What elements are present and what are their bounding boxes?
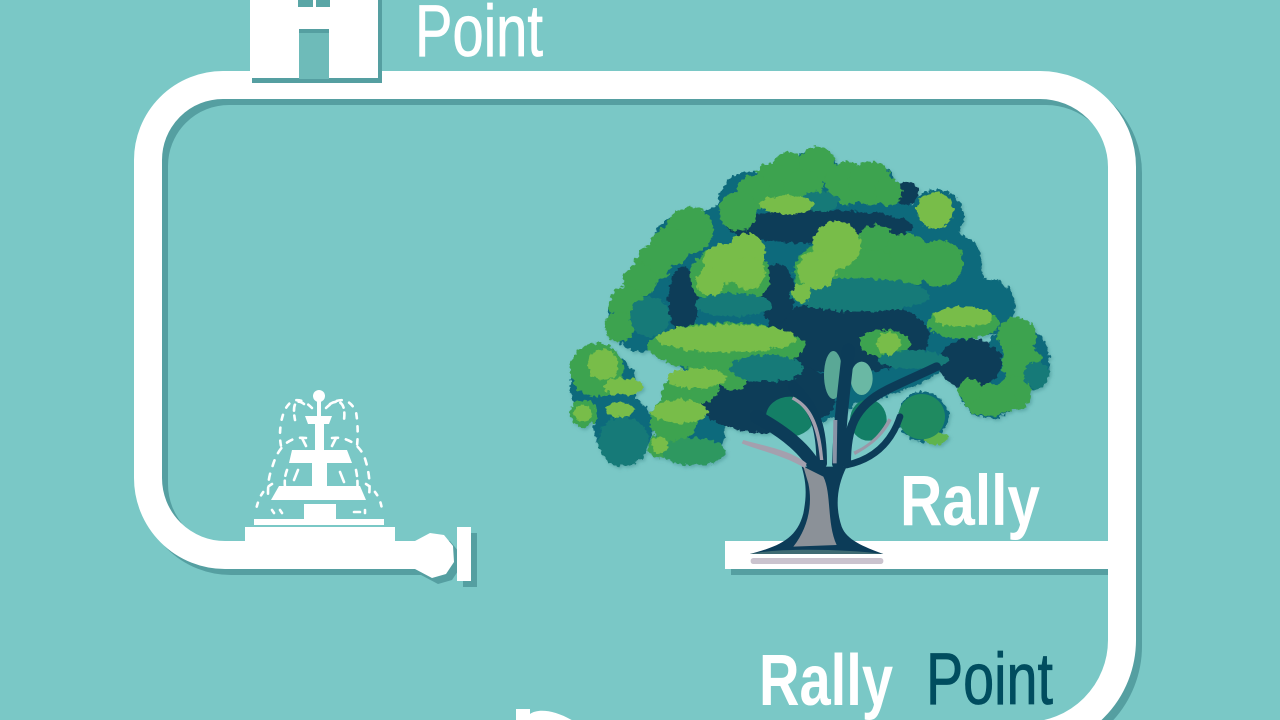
icon: building <box>250 0 382 83</box>
canopy light highlights <box>574 192 993 453</box>
canopy greens <box>570 147 1042 466</box>
canopy outer edge <box>570 150 1050 465</box>
pipe body <box>148 85 1122 720</box>
tree platform branch <box>725 541 1115 569</box>
pipe end cap <box>415 527 477 587</box>
label: Point bottom: Point <box>926 639 1053 720</box>
label: Rally on branch: Rally <box>900 462 1040 541</box>
pipe shadow <box>154 91 1128 720</box>
tree <box>570 147 1050 564</box>
tree trunk and branches <box>742 350 937 554</box>
tree gaps and inner leaves <box>766 351 945 441</box>
branch shadow <box>731 547 1115 575</box>
canopy dark core <box>668 182 1002 433</box>
building door lintel <box>299 29 329 33</box>
tree canopy <box>570 147 1050 467</box>
route pipe <box>148 85 1128 720</box>
building door <box>299 29 329 79</box>
canopy teal accents <box>598 192 1049 467</box>
building windows <box>298 0 330 7</box>
fountain water drops <box>256 400 382 513</box>
cropped bottom icon fragment <box>516 709 575 720</box>
icon: fountain <box>245 390 395 541</box>
label: Rally bottom: Rally <box>759 641 893 720</box>
tree ground shadow <box>751 558 883 564</box>
